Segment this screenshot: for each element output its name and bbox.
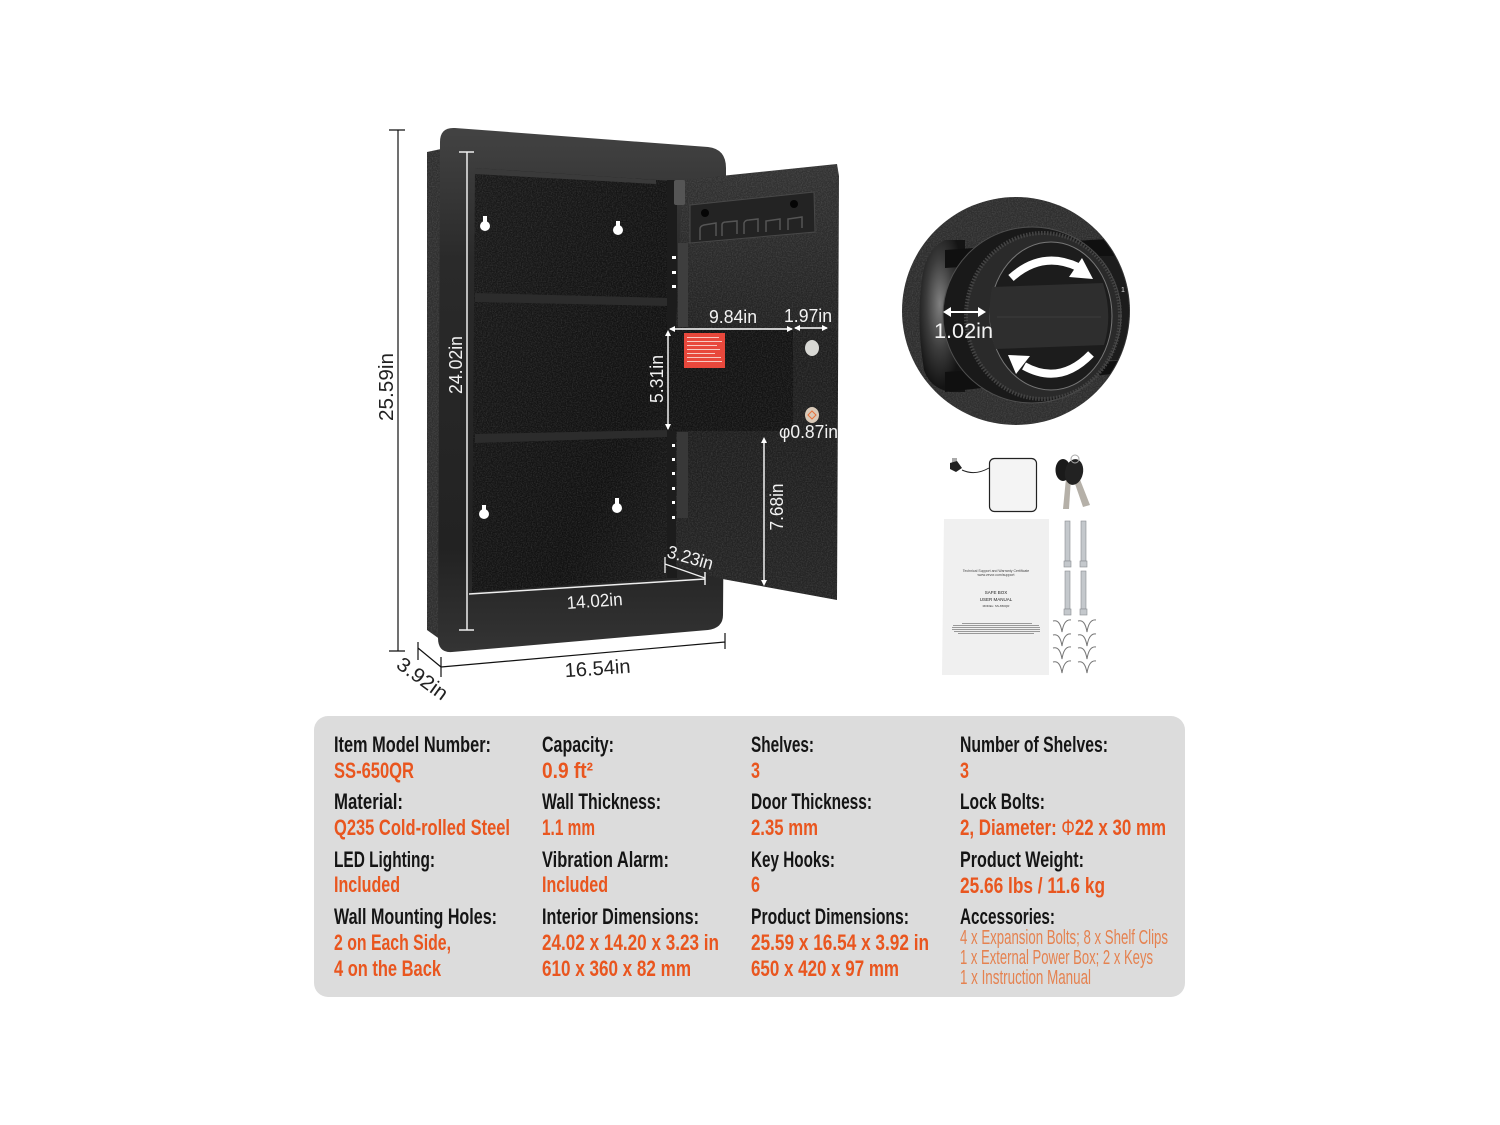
column 4 specs: Lock Bolts: (960, 789, 1045, 814)
circular detail: keypad dial (902, 197, 1130, 425)
column 3 specs: 2.35 mm (751, 815, 818, 840)
column 2 specs: Interior Dimensions: (542, 904, 699, 929)
knob face (990, 242, 1112, 390)
clockwise arrow top (1011, 258, 1093, 279)
column 2 specs: 1.1 mm (542, 815, 595, 840)
dimension: height 25.59in (376, 130, 405, 651)
mounting hole 1 (480, 216, 490, 231)
lock side strip (794, 328, 836, 431)
user manual: SAFE BOX (985, 590, 1007, 595)
upper shelf (475, 293, 668, 306)
column 4 specs: 1 x Instruction Manual (960, 967, 1091, 989)
column 1 specs: 4 on the Back (334, 956, 442, 981)
column 3 specs: 6 (751, 872, 760, 897)
column 2 specs (542, 732, 719, 981)
safe illustration with dimensions (376, 128, 839, 705)
textured shadow blob (919, 240, 965, 392)
column 3 specs: 25.59 x 16.54 x 3.92 in (751, 930, 929, 955)
lock housing (669, 329, 793, 431)
interior right wall (667, 180, 677, 578)
user manual: Technical Support and Warranty Certificate (963, 569, 1029, 573)
right dark wedge (1100, 256, 1130, 360)
lower shelf (475, 430, 668, 443)
door bolts on plate (701, 200, 798, 217)
column 1 specs: SS-650QR (334, 758, 414, 783)
dimension: dial 1.02in: 1.02in (934, 320, 993, 343)
open door (669, 164, 839, 600)
clockwise arrow bottom (1008, 354, 1091, 374)
column 4 specs: Number of Shelves: (960, 732, 1108, 757)
column 1 specs (334, 732, 510, 981)
safe front flange (438, 128, 726, 652)
accessories group (942, 455, 1096, 675)
dimension: interior width 14.02in: 14.02in (566, 589, 623, 613)
column 2 specs: 610 x 360 x 82 mm (542, 956, 691, 981)
mounting hole 3 (479, 505, 489, 519)
user manual: www.vevor.com/support (978, 573, 1015, 577)
dimension: width 16.54in: 16.54in (564, 656, 631, 682)
column 2 specs: 24.02 x 14.20 x 3.23 in (542, 930, 719, 955)
dimension: interior depth 3.23in: 3.23in (665, 542, 716, 574)
column 4 specs: 3 (960, 758, 969, 783)
dimension: dial 1.02in (934, 307, 993, 343)
column 4 specs: Accessories: (960, 904, 1055, 929)
knurled ring (966, 233, 1120, 399)
column 2 specs: Included (542, 872, 608, 897)
dimension: lock housing height 5.31in: 5.31in (647, 355, 667, 403)
top lip (475, 168, 656, 184)
mounting hole 2 (613, 221, 623, 235)
upper lock bolt (805, 340, 819, 356)
user manual: USER MANUAL (980, 597, 1013, 602)
dimension: bolt diameter: φ0.87in (779, 422, 838, 442)
dimension: lock housing height 5.31in (647, 330, 671, 430)
mounting hole 4 (612, 498, 622, 513)
column 1 specs: 2 on Each Side, (334, 930, 451, 955)
dimension: lock housing width 9.84in (669, 307, 793, 332)
column 1 specs: Material: (334, 789, 403, 814)
safe side wall (427, 149, 441, 640)
user manual: MODEL: SS-650QR (983, 604, 1010, 608)
column 2 specs: Wall Thickness: (542, 789, 661, 814)
dimension: interior width 14.02in (469, 572, 705, 613)
column 2 specs: 0.9 ft² (542, 758, 593, 783)
column 2 specs: Capacity: (542, 732, 614, 757)
hinge (674, 180, 685, 205)
dimension: height 25.59in: 25.59in (376, 353, 398, 421)
column 4 specs: 25.66 lbs / 11.6 kg (960, 873, 1105, 898)
column 3 specs: Key Hooks: (751, 847, 835, 872)
dimension: lock strip width 1.97in: 1.97in (784, 306, 832, 326)
dial background (902, 197, 1130, 425)
column 1 specs: Wall Mounting Holes: (334, 904, 497, 929)
column 4 specs: 1 x External Power Box; 2 x Keys (960, 947, 1153, 969)
key hook plate (690, 192, 815, 243)
column 4 specs (960, 732, 1168, 989)
dimension: width 16.54in (441, 633, 725, 682)
keys (1056, 455, 1090, 509)
column 1 specs: Included (334, 872, 400, 897)
dimension: door lower height 7.68in (761, 437, 787, 586)
user manual (942, 519, 1049, 675)
scale mark: 1 (1121, 287, 1125, 294)
key hooks (700, 217, 802, 240)
dimension: lock housing width 9.84in: 9.84in (709, 307, 757, 327)
column 1 specs: LED Lighting: (334, 847, 435, 872)
panel background (314, 716, 1185, 997)
dimension: interior height 24.02in (446, 152, 474, 630)
lower band (945, 360, 1130, 392)
shelf slots (672, 256, 676, 519)
column 4 specs: 2, Diameter: Φ22 x 30 mm (960, 815, 1166, 840)
column 1 specs: Q235 Cold-rolled Steel (334, 815, 510, 840)
knob centre line (997, 316, 1101, 318)
column 4 specs: 4 x Expansion Bolts; 8 x Shelf Clips (960, 927, 1168, 949)
upper band (945, 239, 1115, 268)
warning label (684, 333, 725, 368)
knob centre strip (990, 283, 1108, 349)
lower door rail (677, 432, 688, 518)
upper door rail (678, 243, 688, 327)
column 4 specs: Product Weight: (960, 847, 1084, 872)
column 2 specs: Vibration Alarm: (542, 847, 669, 872)
safe interior (472, 168, 677, 592)
shelf clips (1053, 620, 1096, 673)
column 3 specs: Product Dimensions: (751, 904, 909, 929)
column 3 specs: Door Thickness: (751, 789, 872, 814)
outer ring (943, 227, 1121, 403)
column 3 specs (751, 732, 929, 981)
column 1 specs: Item Model Number: (334, 732, 491, 757)
lower lock bolt (805, 407, 819, 423)
external power box (950, 458, 1036, 512)
column 3 specs: 3 (751, 758, 760, 783)
dimension: interior height 24.02in: 24.02in (446, 336, 466, 394)
column 3 specs: 650 x 420 x 97 mm (751, 956, 899, 981)
column 3 specs: Shelves: (751, 732, 814, 757)
dimension: door lower height 7.68in: 7.68in (767, 484, 787, 530)
dimension: depth 3.92in: 3.92in (392, 653, 452, 705)
specifications panel (314, 716, 1185, 997)
expansion bolts (1064, 521, 1087, 615)
